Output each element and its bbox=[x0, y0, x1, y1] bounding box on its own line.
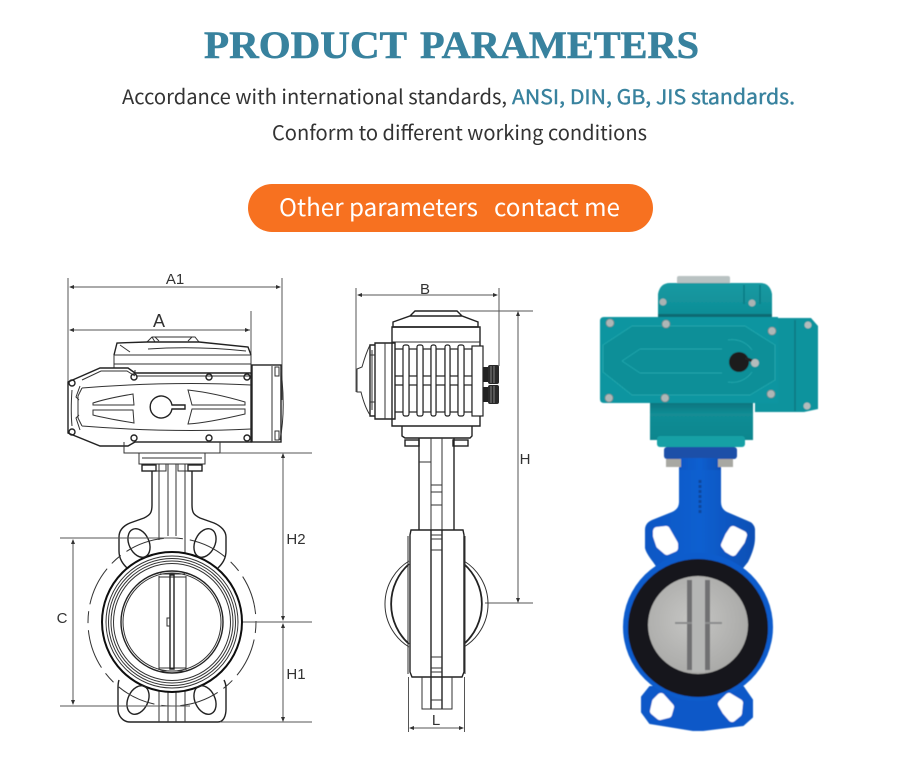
side view technical drawing bbox=[356, 281, 533, 732]
dimension B: B bbox=[420, 281, 430, 298]
dimension H: H bbox=[520, 451, 530, 468]
subtitle line 1: ANSI, DIN, GB, JIS standards. bbox=[512, 81, 795, 110]
title: PARAMETERS bbox=[420, 24, 699, 67]
subtitle line 1: Accordance with international standards, bbox=[122, 81, 507, 110]
mounting base bbox=[124, 442, 220, 471]
actuator top cover bbox=[658, 283, 772, 318]
contact button: contact me bbox=[494, 188, 620, 223]
rubber seat ring bbox=[628, 559, 768, 697]
title: PRODUCT bbox=[204, 24, 407, 67]
dimension A1: A1 bbox=[166, 271, 184, 288]
dashed bolt circle bbox=[72, 522, 272, 722]
actuator screws bbox=[69, 374, 250, 441]
dimension L bbox=[408, 677, 464, 732]
side valve body bbox=[385, 530, 488, 709]
contact button: Other parameters bbox=[279, 188, 478, 223]
butterfly disc bbox=[159, 574, 186, 671]
bolt holes bbox=[123, 525, 220, 718]
side cooling fins bbox=[395, 345, 483, 416]
subtitle line 2: Conform to different working conditions bbox=[272, 117, 647, 146]
dimension H bbox=[460, 311, 533, 603]
dimension C bbox=[57, 538, 190, 706]
actuator side bbox=[357, 311, 480, 426]
actuator right box bbox=[755, 318, 818, 412]
mounting holes bbox=[654, 530, 743, 718]
silver top indicator bbox=[677, 276, 730, 284]
side base and stem bbox=[402, 426, 472, 530]
product photo: electric butterfly valve bbox=[600, 276, 818, 730]
dimensions H2 and H1: H2 bbox=[286, 531, 306, 548]
contact button bbox=[248, 184, 653, 232]
cable glands bbox=[483, 365, 499, 404]
valve disc bbox=[648, 576, 748, 674]
valve blue body bbox=[623, 470, 773, 730]
dimension B bbox=[356, 281, 499, 392]
dimensions H2 and H1: H1 bbox=[286, 666, 306, 683]
actuator screws bbox=[605, 319, 776, 402]
dimension C: C bbox=[57, 610, 68, 627]
dimension A1 bbox=[68, 271, 282, 432]
dimension A: A bbox=[153, 311, 165, 331]
actuator main body bbox=[600, 317, 778, 403]
actuator lower housing bbox=[650, 400, 753, 447]
valve body outline bbox=[102, 464, 242, 722]
valve neck and flange bbox=[664, 447, 737, 518]
front view technical drawing bbox=[57, 271, 312, 722]
dimension L: L bbox=[432, 712, 440, 729]
black indicator knob bbox=[729, 352, 759, 372]
dimensions H2 and H1 bbox=[220, 453, 312, 722]
dimension A bbox=[69, 311, 251, 356]
actuator front bbox=[68, 337, 283, 446]
